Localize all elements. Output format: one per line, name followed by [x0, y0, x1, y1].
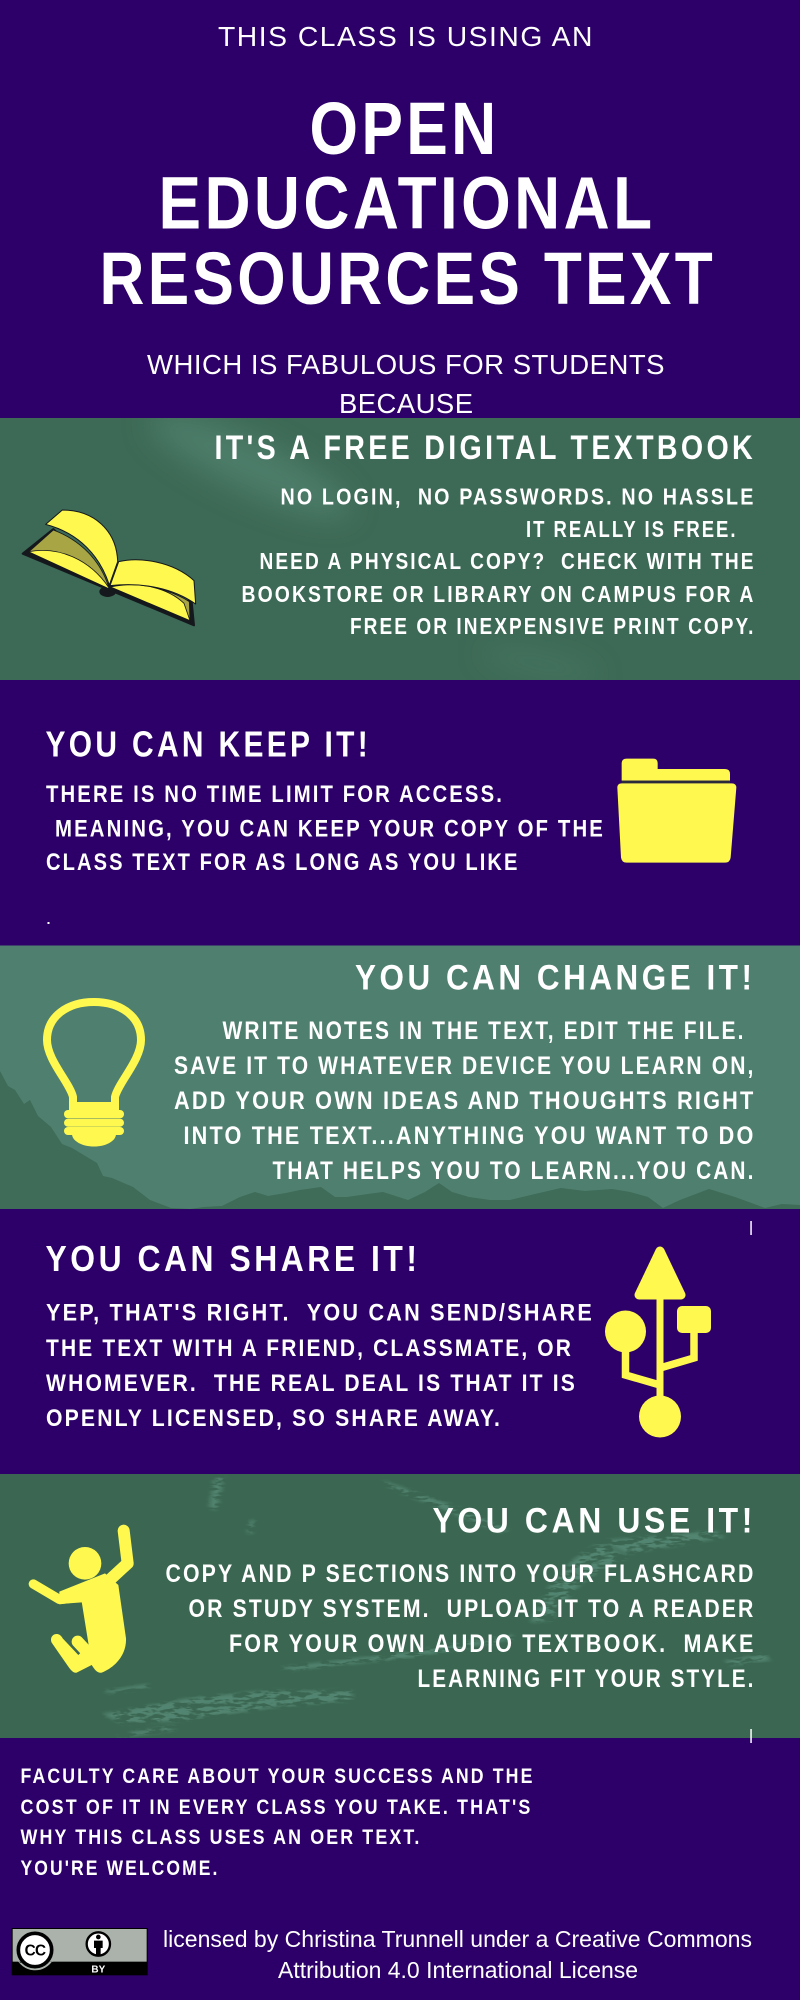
text block [174, 1017, 756, 1185]
closing note: YOU'RE WELCOME. [20, 1857, 220, 1880]
text block: IT REALLY IS FREE. [526, 516, 738, 542]
panel: keep it [46, 724, 736, 924]
heading: YOU CAN CHANGE IT! [355, 958, 756, 998]
cursor tick [750, 1729, 752, 1743]
license text [163, 1926, 752, 1983]
title: EDUCATIONAL [158, 162, 656, 244]
panel: use it [0, 1474, 800, 1738]
icon: jumping person [33, 1531, 128, 1673]
title [100, 87, 716, 320]
closing note: FACULTY CARE ABOUT YOUR SUCCESS AND THE [20, 1765, 534, 1788]
title: OPEN [310, 87, 500, 170]
text block [166, 1560, 756, 1693]
text block [46, 1300, 594, 1432]
text block: THERE IS NO TIME LIMIT FOR ACCESS. [46, 781, 504, 808]
text block [242, 484, 756, 639]
cursor tick [750, 1221, 752, 1235]
panel: change it [0, 946, 800, 1209]
header: title block [100, 21, 716, 419]
subtitle: BECAUSE [339, 388, 474, 419]
badge: creative commons by: CC [25, 1942, 46, 1959]
text block: THE TEXT WITH A FRIEND, CLASSMATE, OR [46, 1335, 573, 1362]
text block: OPENLY LICENSED, SO SHARE AWAY. [46, 1405, 502, 1432]
heading: YOU CAN SHARE IT! [46, 1238, 420, 1279]
text block: WHOMEVER. THE REAL DEAL IS THAT IT IS [46, 1370, 577, 1397]
icon: usb symbol [605, 1251, 711, 1438]
icon: open book [23, 510, 196, 625]
panel: share it [46, 1221, 752, 1438]
badge: creative commons by: BY [91, 1965, 106, 1976]
subtitle [147, 349, 665, 419]
heading: YOU CAN KEEP IT! [46, 724, 371, 764]
subtitle: WHICH IS FABULOUS FOR STUDENTS [147, 349, 665, 380]
mountain background [0, 1071, 800, 1209]
icon: folder [617, 759, 736, 863]
closing note [20, 1765, 534, 1880]
closing note: COST OF IT IN EVERY CLASS YOU TAKE. THAT'S [20, 1796, 532, 1819]
intro line: THIS CLASS IS USING AN [218, 21, 594, 52]
text block [46, 781, 605, 876]
license text: licensed by Christina Trunnell under a Creative Commons [163, 1926, 752, 1952]
icon: light bulb [47, 1002, 141, 1146]
text block: CLASS TEXT FOR AS LONG AS YOU LIKE [46, 849, 520, 876]
badge: creative commons by [12, 1928, 148, 1976]
heading: YOU CAN USE IT! [432, 1500, 756, 1540]
stray dot [48, 922, 50, 924]
license text: Attribution 4.0 International License [278, 1957, 638, 1983]
panel: free digital textbook [0, 418, 800, 680]
closing note: WHY THIS CLASS USES AN OER TEXT. [20, 1826, 422, 1849]
text block: MEANING, YOU CAN KEEP YOUR COPY OF THE [55, 816, 605, 842]
text block: YEP, THAT'S RIGHT. YOU CAN SEND/SHARE [46, 1300, 594, 1326]
